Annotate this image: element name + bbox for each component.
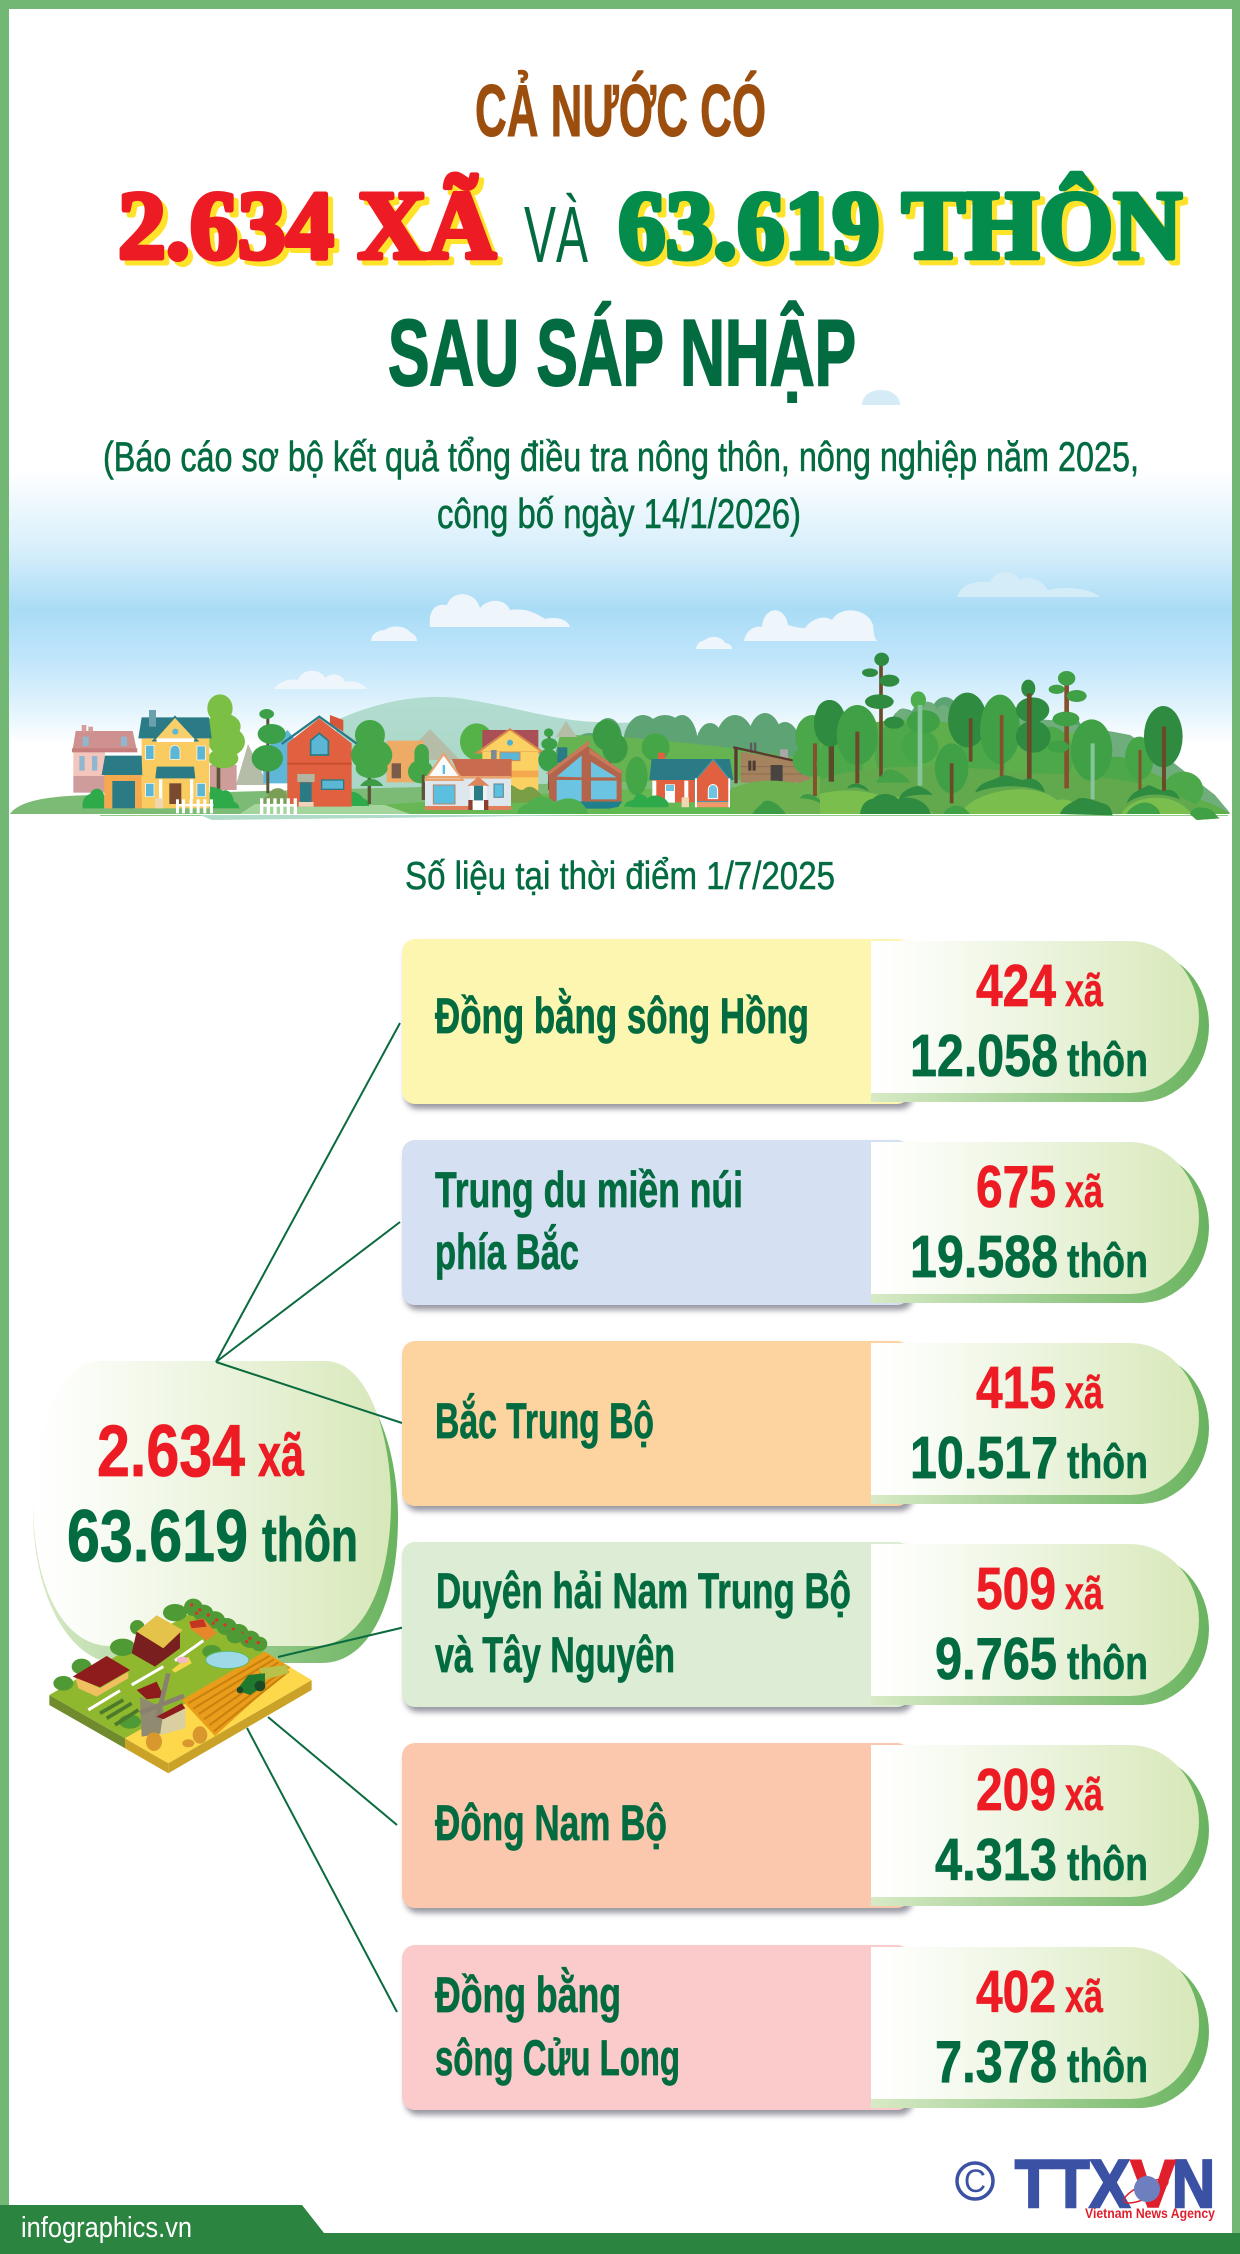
region label box [402,939,910,1104]
counts pill [871,1745,1209,1906]
house: yellow [102,710,212,808]
region label box: Duyên hải Nam Trung Bộ [436,1563,851,1619]
house: orange behind [387,741,423,782]
crop field [182,1652,291,1736]
forest: bushes [847,775,1180,815]
subtitle [103,433,1139,537]
fence: yellow house [176,799,213,813]
tree: dark far left [814,700,846,782]
tree: small front [935,743,968,803]
house: red brick [282,715,357,807]
counts pill [871,941,1209,1102]
row 6: Đồng bằng sông Cửu Long [402,1945,1209,2110]
total xã: 2.634 [97,1411,245,1492]
logo: TTXVN: N [1172,2146,1215,2222]
counts pill: xã [1065,1768,1103,1820]
counts pill: 415 [976,1355,1056,1421]
counts pill: 10.517 [910,1425,1058,1491]
counts pill: 12.058 [910,1023,1058,1089]
counts pill: 19.588 [910,1224,1058,1290]
tree: dark tall [1016,680,1051,780]
counts pill: xã [1065,1567,1103,1619]
icon: isometric farm [49,1599,312,1773]
counts pill: 4.313 [935,1827,1057,1893]
row 5: Đông Nam Bộ [402,1743,1209,1908]
windmill [137,1673,185,1737]
subtitle: công bố ngày 14/1/2026) [437,490,801,537]
house: red bungalow [649,753,733,807]
counts pill: thôn [1067,2039,1148,2092]
counts pill [871,1947,1209,2108]
headline: 63.619 thôn: 63.619 THÔN [618,172,1182,280]
counts pill: thôn [1067,1033,1148,1086]
row 2: Trung du miền núi phía Bắc [402,1140,1209,1305]
logo: TTXVN: V [1130,2146,1176,2222]
forest: front hills [820,789,1192,814]
counts pill: 9.765 [935,1626,1057,1692]
row 4: Duyên hải Nam Trung Bộ và Tây Nguyên [402,1542,1209,1707]
hill under cabin [730,770,840,814]
tree: mid behind bungalow [642,733,670,763]
tree: front of bungalow [626,757,648,799]
counts pill: thôn [1067,1435,1148,1488]
farm base [49,1612,312,1773]
cloud: small far top [862,390,900,405]
hay bales [146,1726,207,1751]
region label box: phía Bắc [435,1224,579,1280]
title line 3: SAU SÁP NHẬP [388,300,856,405]
house: glass a-frame [546,740,623,809]
region label box [402,1945,910,2110]
mountains [236,721,577,785]
tree: dark right [1144,706,1183,793]
region label box: Trung du miền núi [435,1162,743,1218]
tree: pale trunk [902,691,940,786]
house: blue behind [263,730,297,783]
house: tudor white [425,754,512,810]
counts pill: xã [1065,1165,1103,1217]
region label box: sông Cửu Long [435,2030,680,2086]
house: yellow two-storey [477,729,543,793]
tree: dark round [948,693,987,762]
counts pill [871,1142,1209,1303]
counts pill: xã [1065,964,1103,1016]
tree: green behind yellow house [460,723,493,760]
counts pill: thôn [1067,1234,1148,1287]
row 1: Đồng bằng sông Hồng [402,939,1209,1104]
tree: right edge [408,744,433,800]
region label box [402,1743,910,1908]
region label box: Đồng bằng sông Hồng [435,988,809,1044]
region label box [402,1341,910,1506]
central total blob [33,1361,398,1663]
orchard row [184,1599,267,1651]
tree: dark behind glass house [593,720,628,767]
tree: mid [837,705,878,783]
bushes [83,787,369,808]
barn [132,1615,183,1667]
icon: copyright: C [964,2163,986,2199]
tree: left small [414,745,429,800]
date note: Số liệu tại thời điểm 1/7/2025 [405,855,835,898]
region label box [402,1542,910,1707]
village middle: houses and trees [414,700,843,814]
title line 1: CẢ NƯỚC CÓ [475,71,766,152]
headline: 2.634 xã: 2.634 XÃ [118,172,496,280]
footer band [0,2205,1240,2254]
village left: houses and trees [72,694,433,814]
region label box: Đông Nam Bộ [435,1795,667,1851]
headline: 2.634 xã: 2.634 XÃ [123,177,501,285]
total xã: xã [258,1422,304,1489]
counts pill [871,1544,1209,1705]
tree: light green behind yellow house [206,694,245,793]
connector lines [216,1023,405,2012]
logo: TTXVN [1015,2146,1215,2222]
sky background [9,470,1232,745]
forest: mid canopy mass [817,722,1203,808]
counts pill: 209 [976,1757,1056,1823]
logo: TTXVN: Vietnam News Agency [1085,2205,1215,2221]
tree: round [351,720,392,804]
clouds [274,572,1100,689]
counts pill: 424 [976,953,1056,1019]
counts pill [871,1343,1209,1504]
back hills [330,697,1230,813]
region label box: Bắc Trung Bộ [435,1393,654,1449]
counts pill: 402 [976,1959,1056,2025]
forest: light bushes [876,769,1219,820]
headline: và: VÀ [524,190,588,279]
total thôn: 63.619 [67,1496,248,1577]
footer site name: infographics.vn [21,2212,192,2244]
counts pill: xã [1065,1970,1103,2022]
tree: mid tall [980,695,1020,777]
tree: right of cabin [793,700,843,796]
counts pill: 7.378 [935,2029,1057,2095]
white fences [88,1641,203,1710]
fence: red house [260,798,297,814]
tree: pale trunk right [1071,719,1112,799]
headline: 63.619 thôn: 63.619 THÔN [623,177,1187,285]
bush: olive [511,785,542,803]
counts pill: 509 [976,1556,1056,1622]
forest right [814,653,1230,820]
counts pill: xã [1065,1366,1103,1418]
counts pill: thôn [1067,1636,1148,1689]
tractor [237,1665,288,1695]
forest: back ridge [895,702,1230,814]
icon: copyright [957,2163,993,2199]
bushes: middle [517,794,825,814]
farm trees [53,1604,243,1729]
tree: pine right [1048,671,1087,788]
tree: small pine [538,728,558,790]
house: wooden cabin [733,743,810,783]
tree: tall pine [862,653,904,777]
total thôn: thôn [262,1506,358,1575]
counts pill: 675 [976,1154,1056,1220]
logo: TTXVN: TTX [1015,2146,1130,2222]
pond [206,1651,249,1669]
farmhouse [73,1656,130,1697]
region label box: Đồng bằng [435,1967,621,2023]
region label box [402,1140,910,1305]
counts pill: thôn [1067,1837,1148,1890]
row 3: Bắc Trung Bộ [402,1341,1209,1506]
title line 2 [118,172,1187,285]
forest: mid hill [820,719,1230,814]
tree: small right [1125,737,1154,795]
house: pink [72,725,237,793]
truck and van [172,1618,217,1673]
ground: village green [10,780,1228,820]
region label box: và Tây Nguyên [435,1627,675,1683]
tree: tall [252,709,287,803]
vegetable garden [100,1700,138,1725]
